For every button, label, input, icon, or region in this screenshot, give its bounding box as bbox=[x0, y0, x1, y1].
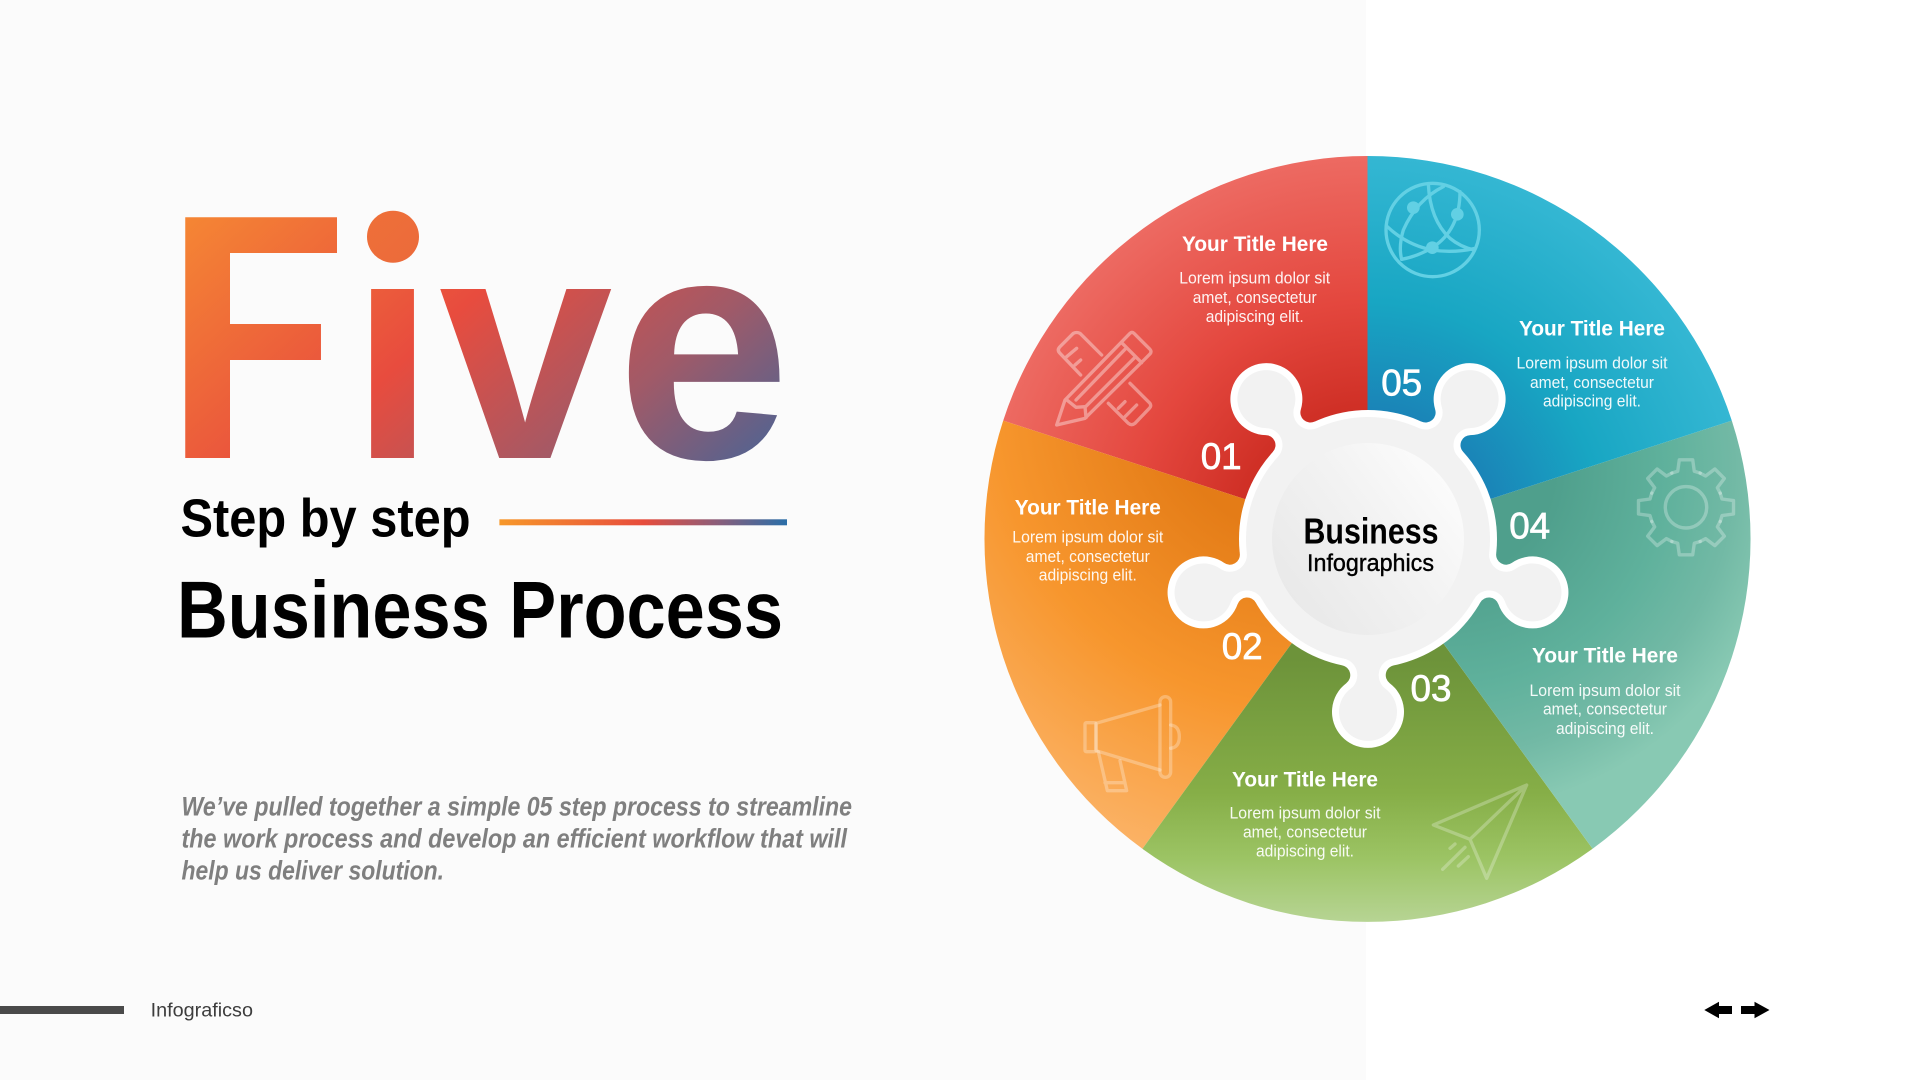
body 05: Lorem ipsum dolor sit bbox=[1516, 354, 1668, 372]
arrow: previous bbox=[1704, 1002, 1732, 1018]
title 03: Your Title Here bbox=[1232, 768, 1378, 791]
body 02: amet, consectetur bbox=[1026, 548, 1150, 566]
panel: step 01 red segment bbox=[1003, 156, 1368, 539]
hub label: Business: Business bbox=[1304, 510, 1438, 551]
body 03: adipiscing elit. bbox=[1256, 842, 1354, 860]
body 03: Lorem ipsum dolor sit bbox=[1230, 804, 1381, 822]
title 01: Your Title Here bbox=[1182, 233, 1328, 256]
body 05: amet, consectetur bbox=[1530, 374, 1654, 392]
body 04: Lorem ipsum dolor sit bbox=[1530, 682, 1681, 700]
title: Five: i bbox=[349, 168, 436, 526]
title: Five: e bbox=[617, 168, 790, 526]
icon: paper plane bbox=[1433, 785, 1527, 878]
number 01: 01 bbox=[1201, 436, 1242, 477]
number 05: 05 bbox=[1381, 363, 1422, 404]
body 01: Lorem ipsum dolor sit bbox=[1179, 269, 1331, 287]
body 04: amet, consectetur bbox=[1543, 700, 1667, 718]
title 02: Your Title Here bbox=[1015, 496, 1161, 519]
number 04: 04 bbox=[1509, 505, 1550, 546]
body 03 bbox=[1230, 804, 1381, 860]
description paragraph: We’ve pulled together a simple 05 step process to streamline bbox=[182, 792, 852, 822]
icon: megaphone bbox=[1085, 697, 1179, 791]
hub: central five-lobed shape bbox=[1158, 349, 1578, 748]
body 01: amet, consectetur bbox=[1193, 289, 1317, 307]
arrow: next bbox=[1741, 1002, 1770, 1018]
title: Five: F bbox=[162, 142, 371, 533]
description paragraph: the work process and develop an efficient workflow that will bbox=[182, 824, 847, 854]
body 02: adipiscing elit. bbox=[1039, 567, 1137, 585]
title 05: Your Title Here bbox=[1519, 317, 1665, 340]
number 03: 03 bbox=[1410, 668, 1452, 709]
panel: step 05 blue segment bbox=[1368, 156, 1732, 539]
body 01: adipiscing elit. bbox=[1206, 308, 1304, 326]
body 03: amet, consectetur bbox=[1243, 824, 1367, 842]
body 04: adipiscing elit. bbox=[1556, 720, 1654, 738]
icon: gear bbox=[1638, 460, 1734, 555]
footer bar bbox=[0, 1006, 124, 1014]
description paragraph: help us deliver solution. bbox=[182, 855, 444, 885]
body 02 bbox=[1012, 529, 1164, 585]
title: Five: v bbox=[439, 168, 615, 526]
icon: pencil and ruler bbox=[1057, 332, 1151, 425]
body 01 bbox=[1179, 269, 1331, 326]
number 02: 02 bbox=[1222, 626, 1263, 667]
title 04: Your Title Here bbox=[1532, 645, 1678, 668]
panel: step 03 green segment bbox=[1142, 539, 1593, 922]
description paragraph bbox=[182, 792, 852, 885]
body 04 bbox=[1530, 682, 1681, 738]
panel: step 04 teal segment bbox=[1368, 421, 1751, 849]
body 05 bbox=[1516, 354, 1668, 411]
hub label: Infographics: Infographics bbox=[1307, 550, 1434, 577]
body 02: Lorem ipsum dolor sit bbox=[1012, 529, 1164, 547]
gradient divider line bbox=[499, 519, 787, 525]
heading: Business Process: Business Process bbox=[177, 566, 783, 656]
panel: step 02 orange segment bbox=[984, 421, 1368, 849]
title: Five bbox=[162, 142, 790, 533]
footer brand: Infograficso bbox=[151, 1001, 253, 1022]
icon: globe bbox=[1386, 183, 1479, 277]
subtitle: Step by step: Step by step bbox=[180, 489, 470, 549]
body 05: adipiscing elit. bbox=[1543, 393, 1641, 411]
